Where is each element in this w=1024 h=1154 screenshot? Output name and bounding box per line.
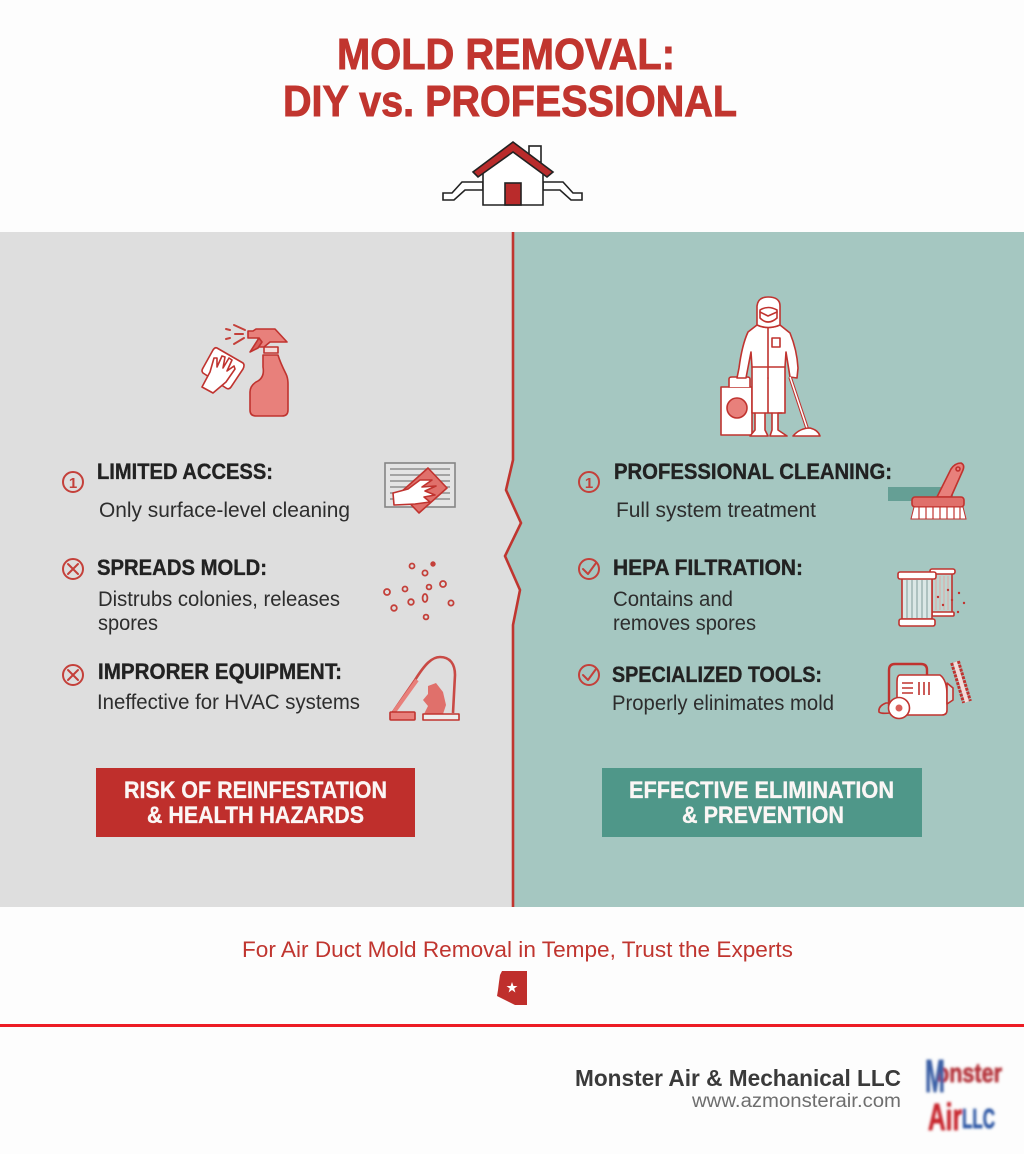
item: hepa filtration: Contains and xyxy=(613,588,733,611)
company name and url: Monster Air & Mechanical LLC xyxy=(575,1065,901,1091)
item: specialized tools xyxy=(579,662,834,715)
icon: air duct cleaning machine xyxy=(879,662,967,718)
item: improper equipment xyxy=(63,659,360,714)
icon: vacuum with mold xyxy=(390,657,459,720)
decorative teal bar xyxy=(888,487,953,501)
tagline: For Air Duct Mold Removal in Tempe, Trust the Experts xyxy=(242,937,793,962)
item: professional cleaning: 1 xyxy=(585,475,593,492)
icon: house with air ducts xyxy=(443,142,582,205)
footer rule xyxy=(0,1024,1024,1027)
callout: effective: EFFECTIVE ELIMINATION xyxy=(629,777,894,804)
logo: onster xyxy=(936,1058,1002,1088)
item: improper equipment: Ineffective for HVAC systems xyxy=(97,691,360,714)
item: hepa filtration: removes spores xyxy=(613,612,756,635)
item: spreads mold: SPREADS MOLD: xyxy=(97,555,267,580)
logo: M xyxy=(925,1050,945,1102)
item: improper equipment: IMPRORER EQUIPMENT: xyxy=(98,659,342,684)
callout: risk: & HEALTH HAZARDS xyxy=(147,802,364,829)
logo: Air xyxy=(928,1097,962,1139)
icon: vent grille with cloth xyxy=(385,463,455,513)
icon: hepa filters xyxy=(898,569,965,626)
item: hepa filtration xyxy=(579,555,803,635)
item: specialized tools: SPECIALIZED TOOLS: xyxy=(612,662,822,687)
item: professional cleaning: Full system treatment xyxy=(616,499,816,522)
icon: spray bottle and gloved hand xyxy=(202,325,288,416)
item: hepa filtration: HEPA FILTRATION: xyxy=(613,555,803,580)
callout: risk xyxy=(96,768,415,837)
callout: effective xyxy=(602,768,922,837)
logo xyxy=(925,1050,1002,1139)
title: MOLD REMOVAL: xyxy=(337,30,675,79)
item: limited access: 1 xyxy=(69,475,77,492)
icon: mold spores xyxy=(384,562,454,619)
panel: DIY xyxy=(0,232,524,907)
item: specialized tools: Properly elinimates mold xyxy=(612,692,834,715)
item: limited access xyxy=(63,459,350,522)
icon: brush xyxy=(911,463,966,519)
title xyxy=(283,30,737,126)
item: spreads mold: spores xyxy=(98,612,158,635)
item: professional cleaning: PROFESSIONAL CLEANING: xyxy=(614,459,892,484)
company name and url xyxy=(575,1065,901,1112)
logo: LLC xyxy=(962,1103,995,1134)
item: limited access: LIMITED ACCESS: xyxy=(97,459,273,484)
icon: Arizona state with star xyxy=(497,971,527,1005)
item: spreads mold: Distrubs colonies, releases xyxy=(98,588,340,611)
item: professional cleaning xyxy=(579,459,892,522)
icon: technician in protective suit xyxy=(721,297,820,436)
callout: risk: RISK OF REINFESTATION xyxy=(124,777,387,804)
callout: effective: & PREVENTION xyxy=(682,802,844,829)
item: limited access: Only surface-level cleaning xyxy=(99,499,350,522)
item: spreads mold xyxy=(63,555,340,635)
title: DIY vs. PROFESSIONAL xyxy=(283,77,737,126)
company name and url: www.azmonsterair.com xyxy=(691,1091,901,1112)
panel: professional xyxy=(505,232,1024,907)
divider: zigzag line xyxy=(505,232,521,907)
